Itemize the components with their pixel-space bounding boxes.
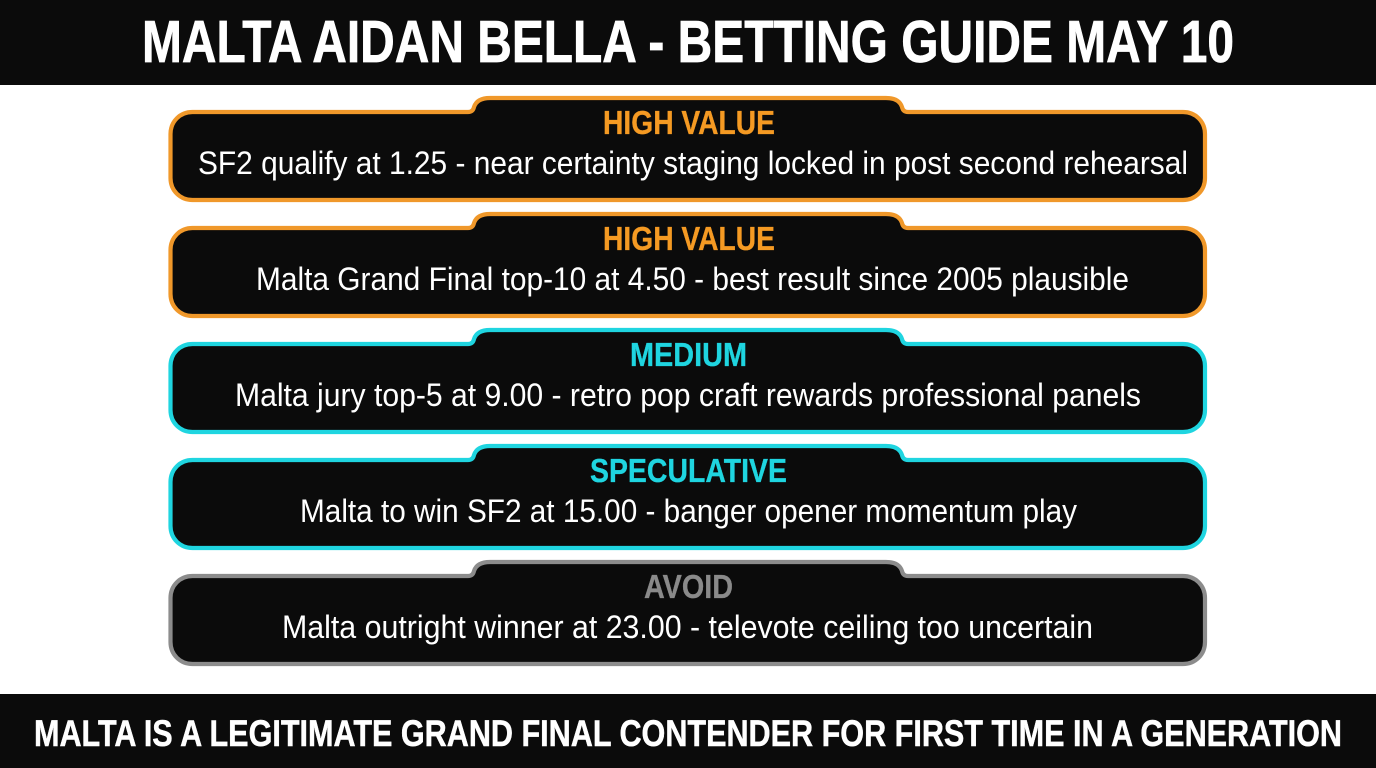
rating label: MEDIUM: [630, 336, 747, 373]
footer banner: [0, 694, 1376, 768]
bet description: SF2 qualify at 1.25 - near certainty staging locked in post second rehearsal: [198, 145, 1188, 181]
panel: high value bet, Grand Final top-10: [170, 214, 1205, 316]
rating label: SPECULATIVE: [590, 452, 787, 489]
bet description: Malta Grand Final top-10 at 4.50 - best result since 2005 plausible: [256, 261, 1129, 297]
panel: avoid bet, outright winner: [170, 562, 1205, 664]
panel: speculative bet, win SF2: [170, 446, 1205, 548]
bet description: Malta to win SF2 at 15.00 - banger opener momentum play: [300, 493, 1078, 529]
bet description: Malta outright winner at 23.00 - televote ceiling too uncertain: [282, 609, 1093, 645]
rating label: AVOID: [644, 568, 733, 605]
rating label: HIGH VALUE: [603, 104, 775, 141]
rating label: HIGH VALUE: [603, 220, 775, 257]
panel: high value bet, SF2 qualify: [170, 98, 1205, 200]
header banner: [0, 0, 1376, 85]
bet description: Malta jury top-5 at 9.00 - retro pop craft rewards professional panels: [235, 377, 1141, 413]
panel: medium bet, jury top-5: [170, 330, 1205, 432]
